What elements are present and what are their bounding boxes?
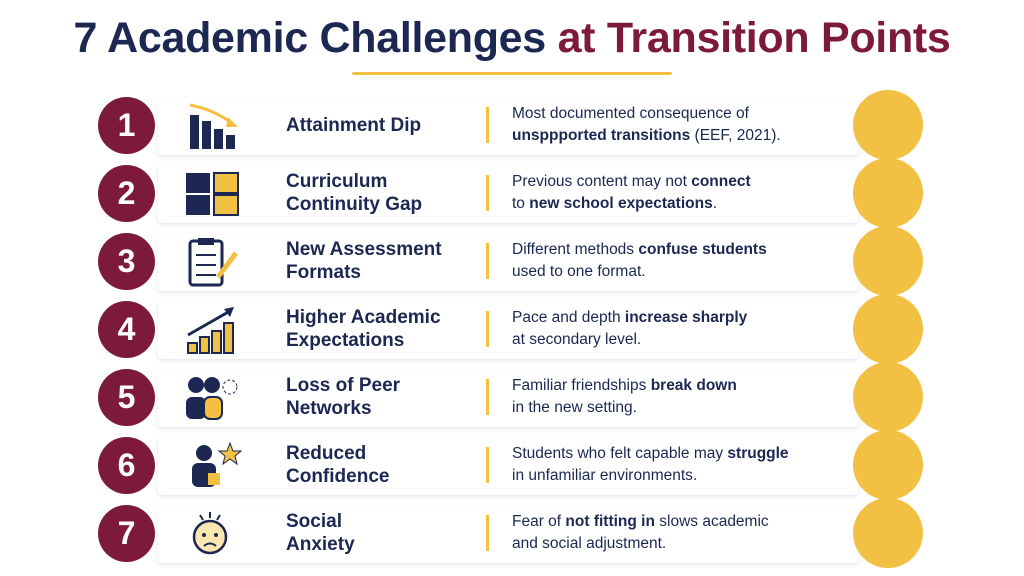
description: to new school expectations. (512, 195, 717, 212)
number 7 (98, 505, 155, 562)
number 4: 4 (118, 311, 135, 347)
description: Fear of not fitting in slows academic (512, 513, 769, 530)
illustration (853, 430, 923, 500)
heading: Networks (286, 398, 372, 419)
description: Previous content may not connect (512, 173, 751, 190)
heading: Anxiety (286, 534, 355, 555)
illustration (853, 362, 923, 432)
heading: Continuity Gap (286, 194, 422, 215)
row 6 (98, 431, 923, 499)
description (512, 309, 748, 348)
description (512, 173, 751, 212)
description: in unfamiliar environments. (512, 467, 697, 484)
illustration (853, 294, 923, 364)
number 6 (98, 437, 155, 494)
number 2: 2 (118, 175, 135, 211)
description: Most documented consequence of (512, 105, 749, 122)
description: Different methods confuse students (512, 241, 767, 258)
heading: Social (286, 511, 342, 532)
illustration (853, 498, 923, 568)
number 3: 3 (118, 243, 135, 279)
description (512, 445, 789, 484)
heading: Expectations (286, 330, 404, 351)
title: 7 Academic Challenges at Transition Points (73, 14, 951, 62)
heading (286, 443, 389, 487)
number 6: 6 (118, 447, 135, 483)
heading: New Assessment (286, 239, 442, 260)
number 1 (98, 97, 155, 154)
row 3 (98, 227, 923, 295)
description: in the new setting. (512, 399, 637, 416)
icon: declining bars (190, 104, 238, 149)
row 7 (98, 499, 923, 568)
description: Students who felt capable may struggle (512, 445, 789, 462)
description: Pace and depth increase sharply (512, 309, 747, 326)
description: at secondary level. (512, 331, 641, 348)
heading (286, 375, 400, 419)
description: used to one format. (512, 263, 646, 280)
heading: Attainment Dip (286, 114, 421, 136)
icon: clipboard (188, 238, 238, 286)
description: unsppported transitions (EEF, 2021). (512, 127, 781, 144)
heading: Higher Academic (286, 307, 441, 328)
row 4 (98, 295, 923, 363)
icon: rising bars (187, 307, 234, 354)
heading (286, 511, 355, 555)
number 4 (98, 301, 155, 358)
number 5: 5 (118, 379, 135, 415)
heading: Reduced (286, 443, 366, 464)
description (512, 377, 737, 416)
icon: puzzle (186, 172, 239, 216)
icon: person with star (192, 442, 242, 487)
number 3 (98, 233, 155, 290)
row 2 (98, 159, 923, 227)
icon: anxious face (192, 512, 228, 554)
row 1 (98, 90, 923, 159)
number 1: 1 (118, 107, 135, 143)
description (512, 241, 767, 280)
heading: Confidence (286, 466, 389, 487)
heading: Formats (286, 262, 361, 283)
illustration (853, 90, 923, 160)
description: Familiar friendships break down (512, 377, 737, 394)
number 5 (98, 369, 155, 426)
description (512, 105, 781, 144)
number 2 (98, 165, 155, 222)
number 7: 7 (118, 515, 135, 551)
illustration (853, 158, 923, 228)
row 5 (98, 363, 923, 431)
heading: Curriculum (286, 171, 387, 192)
icon: people (186, 377, 238, 420)
heading: Loss of Peer (286, 375, 400, 396)
description (512, 513, 769, 552)
title underline (352, 72, 672, 75)
heading (286, 171, 422, 215)
illustration (853, 226, 923, 296)
description: and social adjustment. (512, 535, 666, 552)
heading (286, 239, 442, 283)
heading (286, 307, 441, 351)
